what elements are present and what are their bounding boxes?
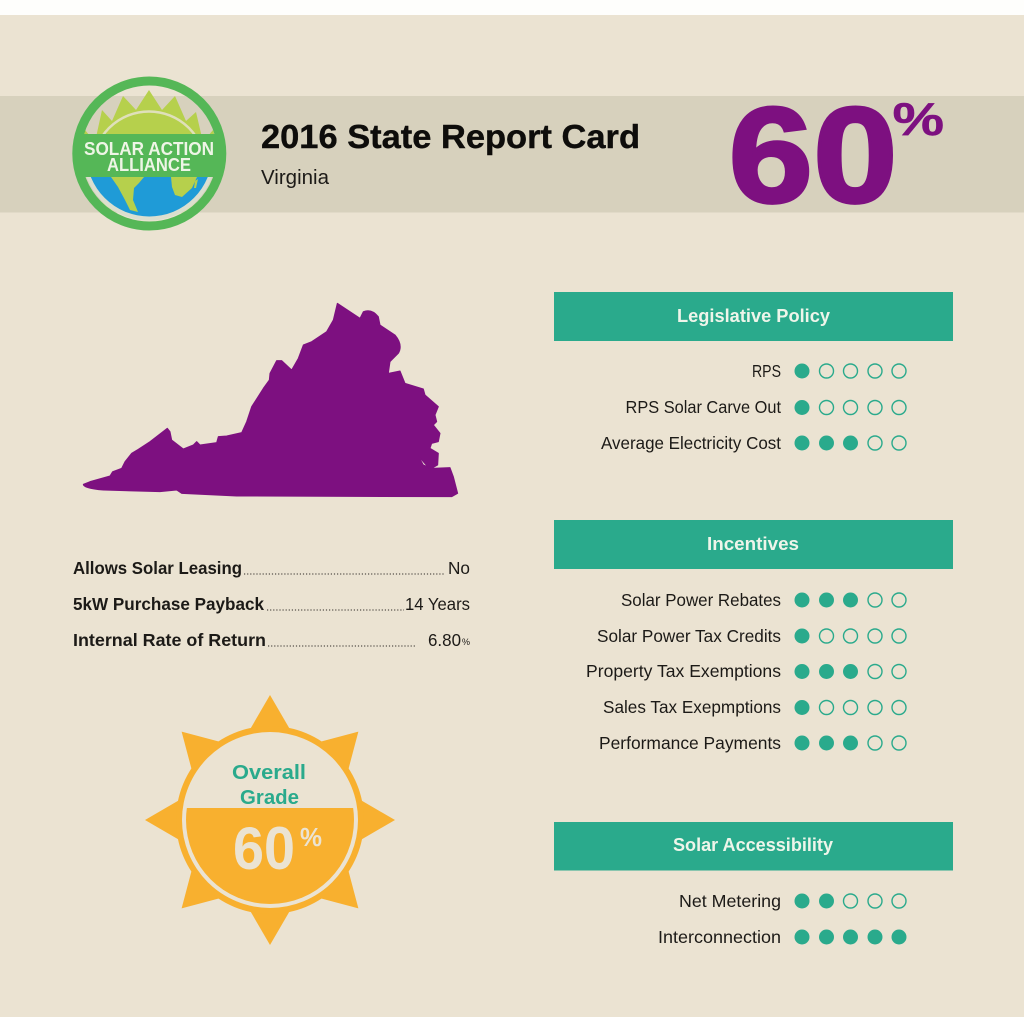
row: interconnection: Interconnection xyxy=(658,927,781,947)
stats list xyxy=(73,558,470,650)
stat: purchase payback: 5kW Purchase Payback xyxy=(73,594,264,614)
stat: internal rate of return: 6.80 xyxy=(428,630,461,650)
stat: purchase payback: 14 Years xyxy=(405,594,470,614)
panel: legislative policy: Legislative Policy xyxy=(677,306,830,326)
headline score: % xyxy=(892,95,944,146)
row: solar power tax credits xyxy=(597,626,906,646)
panel: incentives xyxy=(554,520,953,753)
stat: internal rate of return: Internal Rate of Return xyxy=(73,630,266,650)
row: average electricity cost: Average Electricity Cost xyxy=(601,433,781,453)
stat: solar leasing xyxy=(73,558,470,578)
row: performance payments xyxy=(599,733,906,753)
row: property tax exemptions xyxy=(586,661,906,681)
row: RPS solar carve out xyxy=(626,397,906,417)
logo: Solar Action Alliance: SOLAR ACTION xyxy=(84,138,214,159)
row: RPS xyxy=(752,361,906,381)
row: sales tax exemptions: Sales Tax Exepmptions xyxy=(603,697,781,717)
subtitle: state name: Virginia xyxy=(261,167,330,189)
logo: Solar Action Alliance: ALLIANCE xyxy=(107,154,191,175)
row: net metering xyxy=(679,891,906,911)
stat: internal rate of return xyxy=(73,630,470,650)
panel: solar accessibility: Solar Accessibility xyxy=(673,835,833,855)
headline score: 60 xyxy=(728,78,898,231)
title: 2016 State Report Card xyxy=(261,119,640,156)
panel: incentives: Incentives xyxy=(707,534,799,554)
stat: solar leasing: Allows Solar Leasing xyxy=(73,558,242,578)
stat: purchase payback xyxy=(73,594,470,614)
badge: overall grade sun: 60 xyxy=(233,815,295,882)
row: solar power rebates: Solar Power Rebates xyxy=(621,590,781,610)
badge: overall grade sun: Grade xyxy=(240,786,299,809)
badge: overall grade sun: % xyxy=(300,822,322,852)
row: solar power rebates xyxy=(621,590,906,610)
panel: solar accessibility xyxy=(554,822,953,947)
logo: Solar Action Alliance xyxy=(77,81,222,226)
badge: overall grade sun xyxy=(145,695,395,945)
row: average electricity cost xyxy=(601,433,906,453)
row: property tax exemptions: Property Tax Exemptions xyxy=(586,661,781,681)
row: net metering: Net Metering xyxy=(679,891,781,911)
stat: solar leasing: No xyxy=(448,558,470,578)
badge: overall grade sun: Overall xyxy=(232,761,306,784)
stat: internal rate of return: % xyxy=(462,637,470,647)
row: performance payments: Performance Payments xyxy=(599,733,781,753)
row: sales tax exemptions xyxy=(603,697,906,717)
panel: legislative policy xyxy=(554,292,953,453)
map: Virginia silhouette xyxy=(83,303,458,497)
row: RPS: RPS xyxy=(752,361,781,381)
row: RPS solar carve out: RPS Solar Carve Out xyxy=(626,397,781,417)
row: interconnection xyxy=(658,927,906,947)
row: solar power tax credits: Solar Power Tax Credits xyxy=(597,626,781,646)
